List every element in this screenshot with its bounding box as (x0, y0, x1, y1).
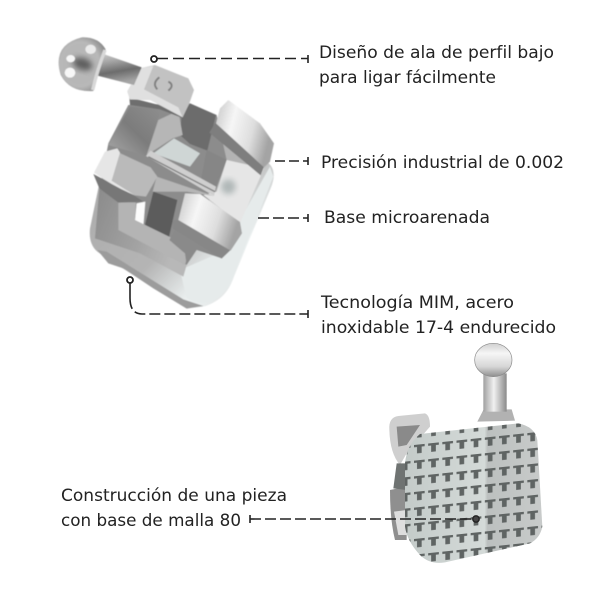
central column (145, 192, 177, 240)
reflection (221, 179, 236, 194)
upper left arm (108, 107, 161, 156)
top block (127, 65, 194, 117)
mesh base (405, 423, 542, 563)
stem (483, 373, 507, 412)
body backing (100, 103, 227, 265)
label: MIM technology (320, 293, 556, 337)
label: one-piece construction: con base de malla 80 (61, 511, 241, 530)
lower right wing (178, 193, 242, 251)
rear wing bottom (390, 487, 407, 540)
rear body (393, 463, 407, 490)
ball (59, 37, 106, 91)
label: low profile wing: Diseño de ala de perfil bajo (319, 43, 554, 62)
label: base: Base microarenada (324, 208, 490, 227)
engraved marks (155, 77, 172, 91)
ball shade (71, 55, 94, 73)
light between wings (203, 160, 264, 223)
illustration: back view with mesh base (389, 343, 547, 567)
slot back (180, 103, 216, 151)
callout line: mesh base (250, 515, 479, 523)
label: precision: Precisión industrial de 0.002 (321, 153, 564, 172)
top right wing underside (209, 120, 264, 175)
ball (475, 343, 512, 377)
step (118, 202, 188, 265)
callout line: microsandblasted base (258, 214, 308, 222)
left wing curve (94, 148, 135, 195)
left wing underside (93, 174, 143, 203)
illustration: front view of bracket (59, 37, 274, 309)
right body (200, 150, 227, 193)
ball rim (93, 50, 105, 90)
label: MIM technology: Tecnología MIM, acero (320, 293, 514, 312)
label: low profile wing: para ligar fácilmente (319, 68, 496, 87)
arm front strip (147, 111, 183, 155)
ball highlights (65, 45, 96, 78)
base teeth (97, 250, 203, 309)
top block underside (129, 97, 183, 118)
rear wing top (389, 413, 430, 465)
callout line: precision (275, 157, 308, 165)
top block highlight (127, 66, 183, 117)
base plate (90, 120, 274, 308)
lower right wing underside (173, 220, 231, 259)
white reflection (135, 202, 145, 227)
label: low profile wing (319, 43, 554, 87)
label: one-piece construction: Construcción de una pieza (61, 486, 287, 505)
callout line: MIM technology (127, 277, 308, 318)
wire channel (146, 151, 216, 196)
stem foot (477, 409, 515, 422)
floor of channel (153, 177, 214, 196)
left wing face (112, 152, 157, 197)
label: one-piece construction (61, 486, 287, 530)
neck (95, 53, 142, 85)
lower shadow panel (95, 188, 187, 277)
top right wing (216, 100, 274, 167)
callout line: low profile wing (151, 55, 308, 63)
right light area (180, 167, 273, 303)
central bright patch (153, 138, 200, 167)
label: MIM technology: inoxidable 17-4 endurecido (321, 318, 556, 337)
